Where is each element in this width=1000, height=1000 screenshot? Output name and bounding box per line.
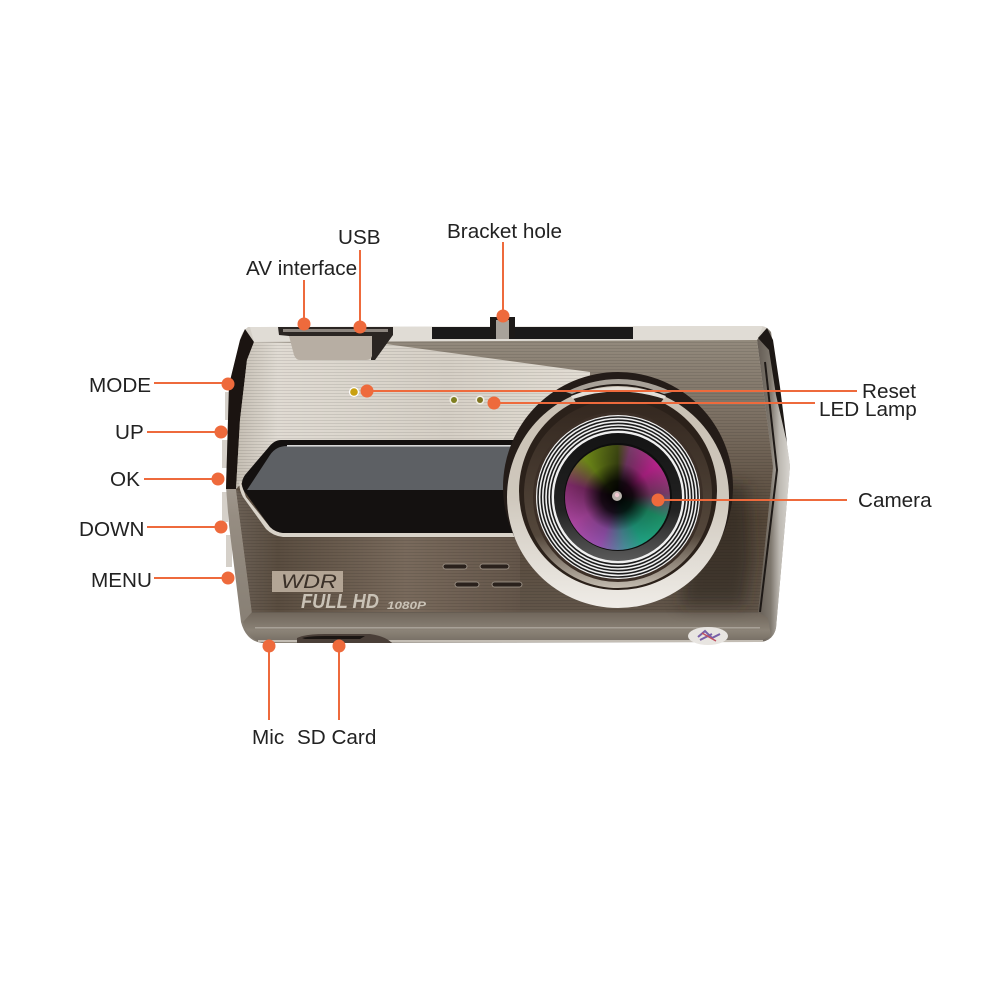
certification sticker — [688, 627, 728, 645]
label: AV interface: AV interface — [246, 257, 357, 280]
callout leader lines — [144, 242, 857, 720]
coloured glass — [565, 445, 670, 550]
right chrome edge — [750, 328, 790, 642]
label: SD Card: SD Card — [297, 726, 376, 749]
FULL HD 1080P mark — [301, 591, 427, 613]
WDR badge — [272, 571, 343, 593]
FULL HD 1080P mark: FULL HD — [301, 591, 379, 613]
speaker vents — [443, 564, 522, 587]
camera lens — [503, 372, 733, 608]
lower brown panel — [236, 489, 520, 613]
label: USB: USB — [338, 226, 381, 249]
label: Bracket hole: Bracket hole — [447, 220, 562, 243]
light upper panel — [236, 342, 590, 489]
shadow right of lens — [680, 480, 752, 605]
screen window — [239, 440, 520, 537]
label: Reset: Reset — [862, 380, 916, 403]
SD card slot — [297, 634, 392, 643]
label: UP: UP — [115, 421, 144, 444]
outer silver ring — [507, 386, 729, 608]
side buttons — [222, 392, 232, 567]
label: OK: OK — [110, 468, 140, 491]
label: MODE: MODE — [89, 374, 151, 397]
label: Mic: Mic — [252, 726, 284, 749]
hood chrome highlight — [566, 379, 672, 394]
lens hood dark — [503, 372, 733, 602]
top arc segment of ring — [572, 388, 665, 410]
ribbed ring — [536, 415, 700, 579]
bracket hole knob — [490, 317, 515, 339]
top button block — [278, 327, 393, 360]
LED and reset holes — [349, 387, 484, 404]
WDR badge: WDR — [281, 572, 337, 593]
brown ring — [519, 392, 717, 590]
brushed metal texture — [236, 340, 773, 613]
label: MENU: MENU — [91, 569, 152, 592]
label: DOWN: DOWN — [79, 518, 144, 541]
inner black ring — [554, 433, 682, 561]
dash camera body — [222, 317, 790, 645]
top silver strip — [250, 326, 763, 342]
label: LED Lamp: LED Lamp — [819, 398, 917, 421]
left dark edge — [226, 329, 254, 489]
right dark strip — [758, 328, 787, 443]
casing outline — [226, 326, 790, 643]
centre highlight — [612, 491, 622, 501]
label: Camera: Camera — [858, 489, 932, 512]
face panel — [236, 340, 773, 613]
bottom band — [243, 612, 771, 642]
FULL HD 1080P mark: 1080P — [387, 600, 427, 612]
callout dots — [212, 310, 664, 652]
